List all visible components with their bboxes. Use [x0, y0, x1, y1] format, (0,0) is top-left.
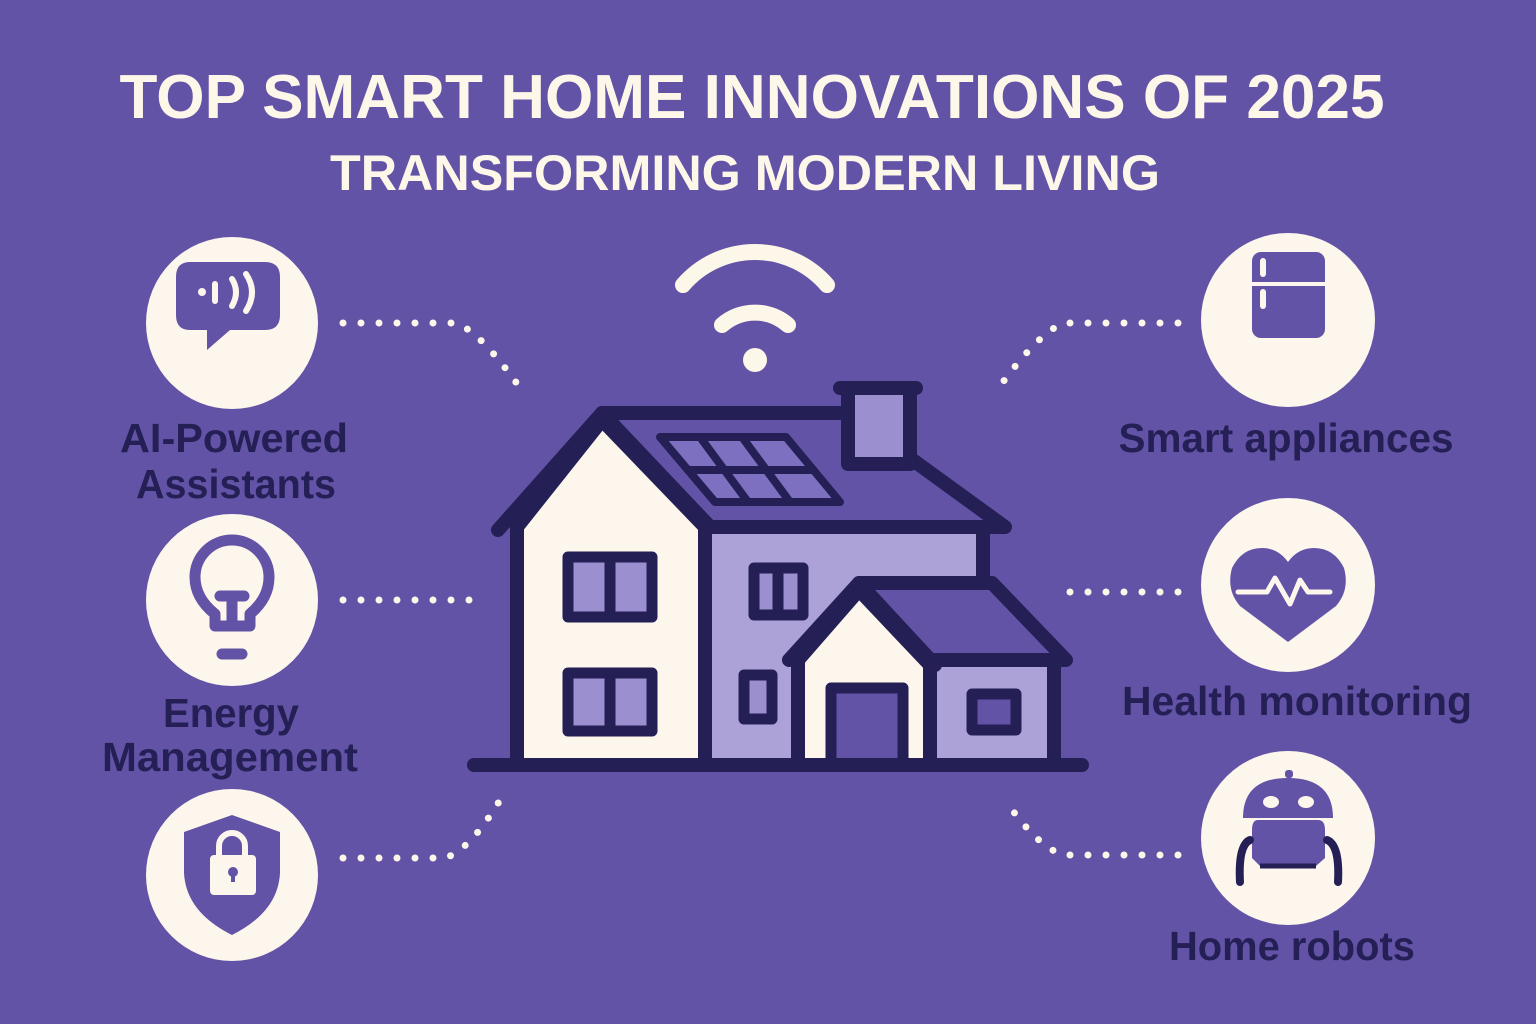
- subtitle: TRANSFORMING MODERN LIVING: [330, 145, 1160, 201]
- icon: shield with lock: [184, 815, 280, 935]
- icon: speech bubble: [176, 262, 280, 350]
- label: Health monitoring: Health monitoring: [1122, 678, 1472, 724]
- icon: heart with pulse: [1230, 548, 1346, 642]
- panel: AI assistants: [120, 237, 348, 507]
- title: TOP SMART HOME INNOVATIONS OF 2025: [120, 63, 1384, 132]
- icon: light bulb: [195, 540, 269, 654]
- label: Energy Management: Energy: [163, 690, 299, 736]
- connector dotted lines: [343, 323, 1178, 858]
- label: Home robots: Home robots: [1169, 923, 1415, 969]
- panel: security: [146, 789, 318, 961]
- icon: robot: [1240, 770, 1338, 882]
- icon: wifi: [683, 252, 827, 372]
- panel: Energy management: Management: [102, 734, 358, 780]
- panel: Energy management: [102, 514, 358, 780]
- label: Smart appliances: Smart appliances: [1118, 415, 1454, 461]
- panel: AI assistants: Assistants: [136, 461, 336, 507]
- icon: fridge: [1252, 252, 1325, 338]
- panel: Health monitoring: [1122, 498, 1472, 724]
- label: AI-Powered Assistants: AI-Powered: [120, 415, 348, 461]
- house illustration: [474, 388, 1082, 765]
- panel: Smart appliances: [1118, 233, 1454, 461]
- panel: Home robots: [1169, 751, 1415, 969]
